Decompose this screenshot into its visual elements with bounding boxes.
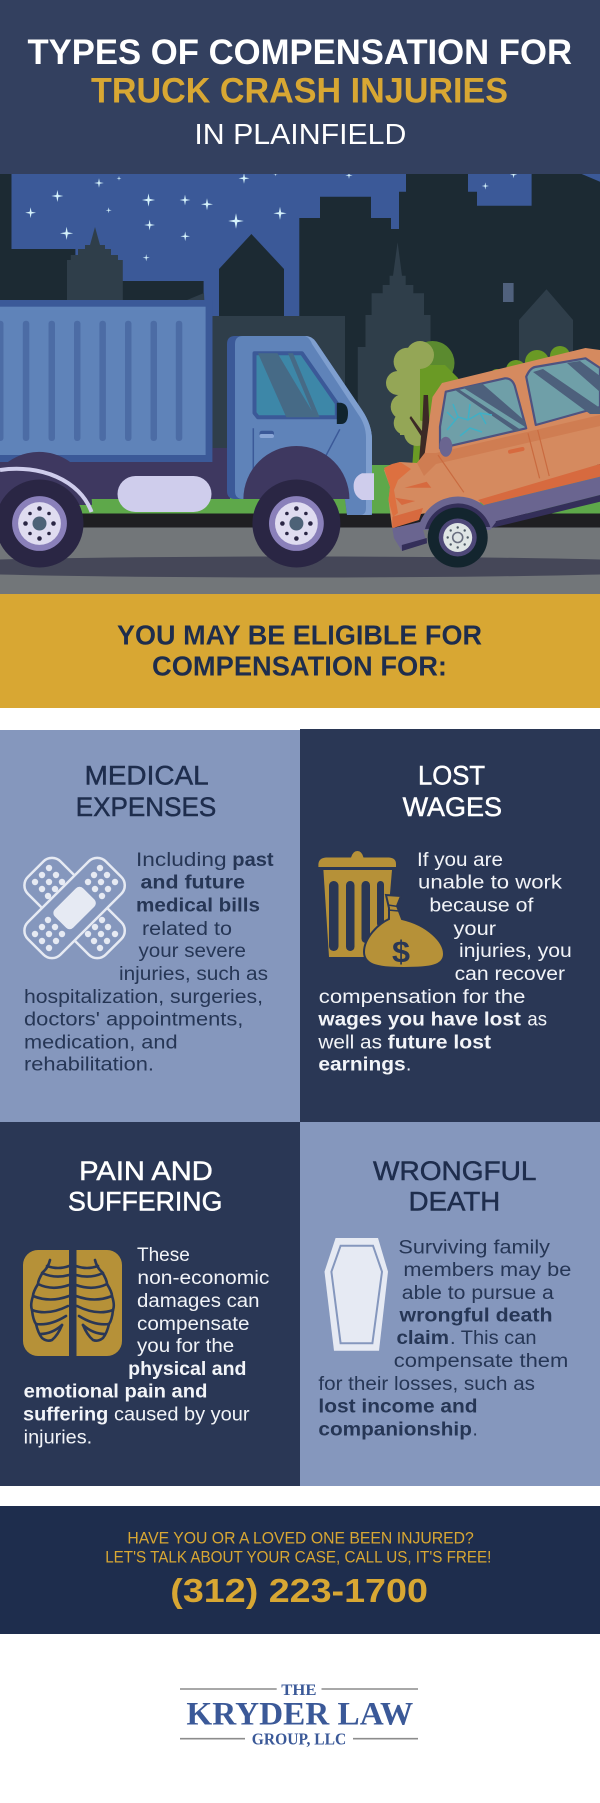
- body text: Including: [136, 850, 227, 871]
- body text: caused by your: [114, 1405, 250, 1426]
- heading: EXPENSES: [76, 792, 216, 822]
- body text: you for the: [137, 1336, 234, 1357]
- heading: WAGES: [403, 792, 502, 822]
- body text: injuries, such as: [119, 964, 268, 985]
- panel: wrongful death: [300, 1122, 600, 1486]
- body text: wrongful death: [398, 1306, 553, 1327]
- body text: and future: [140, 873, 245, 894]
- icon: trash can and money bag: [318, 851, 444, 969]
- body text: able to pursue a: [402, 1283, 554, 1304]
- road: [0, 528, 600, 594]
- rear fender: [0, 452, 92, 505]
- grass: [79, 465, 600, 514]
- phone number: (312) 223-1700: [170, 1572, 428, 1609]
- body text: [24, 850, 274, 1076]
- body text: unable to work: [418, 873, 563, 894]
- skyline: dark buildings: [0, 174, 600, 480]
- body text: .: [406, 1055, 411, 1076]
- body text: medication, and: [24, 1033, 178, 1054]
- car sill: [392, 477, 600, 551]
- body text: lost income and: [318, 1397, 478, 1418]
- heading: WRONGFUL: [373, 1156, 536, 1186]
- crashed car: [384, 348, 600, 568]
- body text: . This can: [450, 1328, 536, 1349]
- body text: If you are: [417, 850, 503, 871]
- body text: .: [472, 1420, 478, 1441]
- heading: [373, 1156, 536, 1217]
- body text: [318, 1237, 571, 1441]
- icon: rib cage: [23, 1248, 122, 1358]
- body text: past: [232, 850, 274, 871]
- banner text: COMPENSATION FOR:: [152, 650, 447, 682]
- title line 2: TRUCK CRASH INJURIES: [91, 72, 508, 110]
- logo: The Kryder Law Group: KRYDER LAW: [186, 1696, 413, 1732]
- heading: [76, 761, 216, 822]
- body text: rehabilitation.: [24, 1055, 154, 1076]
- call to action text: LET'S TALK ABOUT YOUR CASE, CALL US, IT'S FREE!: [105, 1548, 491, 1566]
- stars: [25, 171, 517, 261]
- illustration: truck crash at night: [0, 171, 600, 594]
- trailer: [0, 300, 212, 462]
- body text: claim: [396, 1328, 449, 1349]
- body text: suffering: [23, 1405, 108, 1426]
- door details: [253, 428, 340, 474]
- header banner: [0, 0, 600, 174]
- body text: wages you have lost: [317, 1010, 522, 1031]
- body text: injuries, you: [459, 941, 572, 962]
- icon: coffin: [324, 1238, 388, 1351]
- heading: [68, 1156, 222, 1217]
- logo: The Kryder Law Group: [180, 1680, 418, 1748]
- windshield: [440, 378, 526, 448]
- cab: [227, 336, 372, 515]
- truck: [0, 300, 374, 568]
- call to action footer: [0, 1506, 600, 1634]
- heading: PAIN AND: [79, 1156, 213, 1186]
- cab window: [254, 353, 337, 417]
- body text: compensate: [137, 1314, 250, 1335]
- body text: [23, 1245, 269, 1449]
- title line 1: TYPES OF COMPENSATION FOR: [28, 33, 572, 72]
- body text: well as: [317, 1033, 382, 1054]
- body text: non-economic: [137, 1268, 269, 1289]
- body text: your: [454, 919, 497, 940]
- body text: your severe: [138, 941, 246, 962]
- heading: LOST: [418, 761, 485, 791]
- side window: [526, 358, 600, 425]
- mirror: [337, 403, 348, 424]
- body text: can recover: [455, 964, 566, 985]
- under-body: [0, 448, 230, 499]
- call to action text: [105, 1529, 491, 1566]
- car wheel arch: [419, 497, 496, 530]
- body text: because of: [429, 896, 534, 917]
- body text: related to: [142, 919, 232, 940]
- body text: members may be: [403, 1260, 571, 1281]
- car body: [384, 348, 600, 527]
- side mirror: [439, 437, 452, 457]
- body text: damages can: [137, 1291, 260, 1312]
- body text: compensation for the: [319, 987, 525, 1008]
- side tank: [118, 476, 212, 512]
- heading: MEDICAL: [85, 761, 209, 791]
- logo: The Kryder Law Group: THE: [281, 1680, 317, 1699]
- crumpled bonnet: [384, 462, 411, 517]
- car door lines: [438, 430, 549, 492]
- gold banner: [0, 594, 600, 708]
- body text: emotional pain and: [24, 1382, 207, 1403]
- kerb: [82, 514, 600, 528]
- body text: hospitalization, surgeries,: [24, 987, 263, 1008]
- car wheel: [428, 508, 488, 568]
- headlight: [354, 473, 374, 500]
- panel: medical expenses: [0, 730, 300, 1122]
- front arch: [243, 446, 349, 499]
- banner text: [117, 620, 482, 682]
- logo: The Kryder Law Group: GROUP, LLC: [252, 1729, 346, 1748]
- icon: bandages: [19, 853, 130, 963]
- windshield cracks: [447, 404, 492, 436]
- panel: lost wages: [300, 729, 600, 1122]
- banner text: YOU MAY BE ELIGIBLE FOR: [117, 620, 482, 650]
- heading: DEATH: [409, 1187, 500, 1217]
- front wheel: [252, 480, 340, 568]
- body text: These: [137, 1245, 190, 1266]
- tree: [386, 341, 570, 470]
- body text: [317, 850, 572, 1076]
- body text: future lost: [388, 1033, 492, 1054]
- icon: trash can and money bag: $: [392, 934, 410, 969]
- body text: for their losses, such as: [318, 1374, 535, 1395]
- road shadow: [0, 556, 600, 578]
- body text: injuries.: [24, 1428, 92, 1449]
- body text: doctors' appointments,: [24, 1010, 243, 1031]
- body text: earnings: [318, 1055, 406, 1076]
- body text: Surviving family: [398, 1237, 551, 1258]
- body text: as: [527, 1010, 547, 1031]
- body text: physical and: [128, 1359, 246, 1380]
- heading: SUFFERING: [68, 1187, 222, 1217]
- body text: medical bills: [136, 896, 260, 917]
- call to action text: HAVE YOU OR A LOVED ONE BEEN INJURED?: [127, 1529, 474, 1547]
- panel: pain and suffering: [0, 1122, 300, 1486]
- heading: [403, 761, 502, 822]
- body text: companionship: [318, 1420, 472, 1441]
- body text: compensate them: [394, 1351, 568, 1372]
- rear wheel: [0, 480, 84, 568]
- title line 3: IN PLAINFIELD: [194, 119, 406, 151]
- skyline: lighter buildings: [67, 227, 573, 480]
